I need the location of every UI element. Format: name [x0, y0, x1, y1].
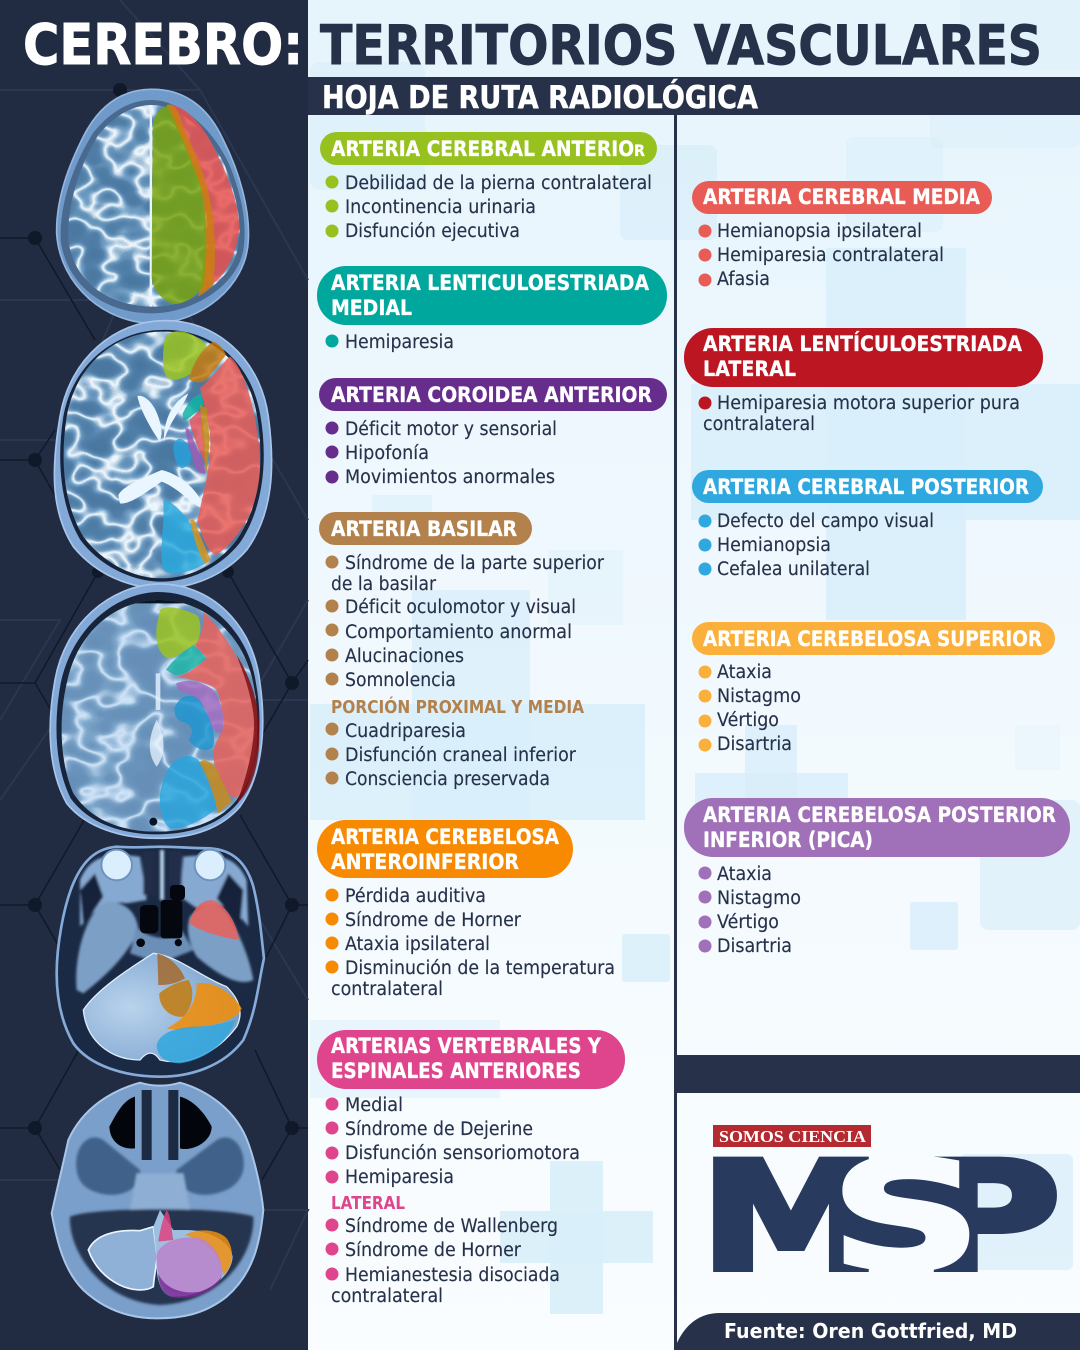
panel: arteria basilar: Síndrome de la parte superior: [345, 553, 604, 574]
panel: arteria cerebral anterior: [320, 132, 657, 242]
overlay: vascular territories slice 1: [152, 104, 239, 304]
panel: arteria cerebral posterior: Hemianopsia: [717, 535, 831, 556]
panel: arteria basilar: Consciencia preservada: [345, 769, 550, 790]
panel: arterias vertebrales y espinales anteriores: [317, 1030, 625, 1307]
panel: arteria cerebral posterior: Defecto del campo visual: [717, 511, 934, 532]
panel: arteria cerebelosa anteroinferior: ARTERIA CEREBELOSA: [331, 825, 560, 849]
page background: [308, 0, 1080, 1350]
panel: arteria lenticuloestriada lateral: [684, 328, 1043, 435]
logo: somos ciencia MSP: M: [700, 1131, 882, 1305]
logo: somos ciencia MSP: P: [920, 1131, 1061, 1305]
eyes: [101, 850, 225, 880]
panel: arteria basilar: Disfunción craneal inferior: [345, 745, 576, 766]
brain slice 5: [52, 1083, 263, 1318]
subtitle bar: [308, 77, 1080, 116]
panel: arteria basilar: ARTERIA BASILAR: [331, 517, 517, 541]
panel: arteria cerebelosa posterior inferior: [684, 798, 1070, 957]
panel: arteria cerebral anterior: Debilidad de la pierna contralateral: [345, 173, 652, 194]
panel: arteria basilar: Cuadriparesia: [345, 721, 466, 742]
panel: arteria cerebelosa anteroinferior: Disminución de la temperatura: [345, 958, 615, 979]
logo: somos ciencia MSP: [700, 1125, 1061, 1305]
brain slice 4: [57, 847, 264, 1077]
footer: source: Fuente: Oren Gottfried, MD: [724, 1319, 1017, 1343]
brain slice 2: [54, 321, 272, 588]
panel: arteria cerebelosa posterior inferior: Vértigo: [717, 912, 779, 933]
ventricles: [118, 393, 205, 508]
panel: arteria lenticuloestriada medial: Hemiparesia: [345, 332, 454, 353]
panel: arteria cerebral anterior: ARTERIA CEREBRAL ANTERIOR: [331, 137, 645, 161]
panel: arteria cerebral media: Hemianopsia ipsilateral: [717, 221, 922, 242]
panel: arterias vertebrales y espinales anteriores: Hemianestesia disociada: [345, 1265, 560, 1286]
logo: somos ciencia MSP: SOMOS CIENCIA: [719, 1127, 867, 1146]
panel: arteria coroidea anterior: Movimientos anormales: [345, 467, 555, 488]
panel: arterias vertebrales y espinales anteriores: Síndrome de Wallenberg: [345, 1216, 558, 1237]
panel: arteria coroidea anterior: Hipofonía: [345, 443, 429, 464]
panel: arteria cerebral anterior: Disfunción ejecutiva: [345, 221, 520, 242]
panel: arterias vertebrales y espinales anteriores: Hemiparesia: [345, 1167, 454, 1188]
brain slice 1: [57, 89, 249, 323]
panel: arteria cerebelosa superior: Ataxia: [717, 662, 772, 683]
subtitle bar: HOJA DE RUTA RADIOLÓGICA: [322, 77, 759, 116]
column divider: [674, 115, 677, 1350]
panel: arteria cerebral posterior: [692, 470, 1043, 580]
panel: arteria cerebelosa posterior inferior: Ataxia: [717, 864, 772, 885]
panel: arterias vertebrales y espinales anteriores: LATERAL: [331, 1194, 405, 1214]
panel: arteria basilar: [319, 512, 604, 790]
panel: arteria cerebral posterior: Cefalea unilateral: [717, 559, 870, 580]
dark band above logo: [677, 1055, 1080, 1093]
panel: arteria cerebelosa superior: ARTERIA CEREBELOSA SUPERIOR: [703, 627, 1042, 651]
brain slice 3: [50, 584, 263, 838]
panel: arteria cerebelosa anteroinferior: Ataxia ipsilateral: [345, 934, 490, 955]
panel: arteria cerebelosa superior: Nistagmo: [717, 686, 801, 707]
panel: arterias vertebrales y espinales anteriores: ESPINALES ANTERIORES: [331, 1059, 581, 1083]
panel: arterias vertebrales y espinales anteriores: Síndrome de Horner: [345, 1240, 521, 1261]
panel: arteria coroidea anterior: [319, 378, 667, 488]
cerebellum: [88, 1227, 157, 1290]
panel: arteria cerebral media: ARTERIA CEREBRAL MEDIA: [703, 185, 981, 209]
overlay: vascular territories slice 5: [156, 1210, 232, 1298]
panel: arteria coroidea anterior: ARTERIA COROIDEA ANTERIOR: [331, 383, 652, 407]
panel: arteria cerebelosa posterior inferior: Disartria: [717, 936, 792, 957]
panel: arteria cerebelosa posterior inferior: INFERIOR (PICA): [703, 828, 873, 852]
panel: arteria cerebelosa anteroinferior: [317, 820, 615, 1000]
overlay: vascular territories slice 4: [157, 900, 242, 1063]
panel: arteria basilar: Alucinaciones: [345, 646, 464, 667]
footer: source: [676, 1313, 1080, 1350]
overlay: vascular territories slice 2: [161, 331, 260, 573]
panel: arteria lenticuloestriada lateral: Hemiparesia motora superior pura: [717, 393, 1020, 414]
panel: arteria cerebelosa anteroinferior: Síndrome de Horner: [345, 910, 521, 931]
panel: arteria cerebelosa anteroinferior: ANTEROINFERIOR: [331, 850, 519, 874]
panel: arteria cerebelosa anteroinferior: Pérdida auditiva: [345, 886, 486, 907]
panel: arteria basilar: Déficit oculomotor y visual: [345, 597, 576, 618]
panel: arteria cerebral media: [692, 181, 992, 290]
panel: arteria cerebelosa posterior inferior: Nistagmo: [717, 888, 801, 909]
overlay: vascular territories slice 3: [156, 607, 259, 829]
panel: arteria basilar: de la basilar: [331, 574, 436, 595]
panel: arteria cerebelosa superior: Vértigo: [717, 710, 779, 731]
panel: arteria cerebelosa superior: Disartria: [717, 734, 792, 755]
cerebellum: [83, 953, 240, 1062]
panel: arteria cerebral anterior: Incontinencia urinaria: [345, 197, 536, 218]
sinuses: [136, 885, 185, 947]
panel: arterias vertebrales y espinales anteriores: Síndrome de Dejerine: [345, 1119, 533, 1140]
panel: arteria cerebral media: Afasia: [717, 269, 770, 290]
title: CEREBRO: CEREBRO:: [23, 13, 303, 78]
logo: somos ciencia MSP: S: [830, 1130, 982, 1304]
panel: arterias vertebrales y espinales anteriores: ARTERIAS VERTEBRALES Y: [331, 1034, 602, 1058]
panel: arteria cerebral posterior: ARTERIA CEREBRAL POSTERIOR: [703, 475, 1029, 499]
panel: arteria lenticuloestriada medial: MEDIAL: [331, 296, 412, 320]
panel: dark left column: [0, 0, 308, 1350]
panel: arteria basilar: PORCIÓN PROXIMAL Y MEDIA: [331, 696, 584, 718]
panel: arteria basilar: Comportamiento anormal: [345, 622, 572, 643]
panel: arteria cerebral media: Hemiparesia contralateral: [717, 245, 944, 266]
panel: arteria lenticuloestriada lateral: ARTERIA LENTÍCULOESTRIADA: [703, 331, 1023, 356]
background medical shapes: [310, 0, 1080, 1314]
panel: arterias vertebrales y espinales anteriores: Medial: [345, 1095, 403, 1116]
panel: arteria coroidea anterior: Déficit motor y sensorial: [345, 419, 557, 440]
panel: arteria lenticuloestriada medial: [317, 266, 667, 353]
panel: arterias vertebrales y espinales anteriores: Disfunción sensoriomotora: [345, 1143, 580, 1164]
connector lines and nodes: [0, 83, 308, 1180]
panel: arteria cerebelosa anteroinferior: contralateral: [331, 979, 443, 1000]
panel: arteria lenticuloestriada medial: ARTERIA LENTICULOESTRIADA: [331, 271, 650, 295]
panel: arteria lenticuloestriada lateral: contralateral: [703, 414, 815, 435]
panel: arteria basilar: Somnolencia: [345, 670, 456, 691]
sinuses: [109, 1097, 212, 1149]
background hexagon network: [0, 0, 308, 1290]
panel: arteria cerebelosa superior: [692, 622, 1055, 755]
panel: arterias vertebrales y espinales anteriores: contralateral: [331, 1286, 443, 1307]
panel: arteria lenticuloestriada lateral: LATERAL: [703, 357, 796, 381]
